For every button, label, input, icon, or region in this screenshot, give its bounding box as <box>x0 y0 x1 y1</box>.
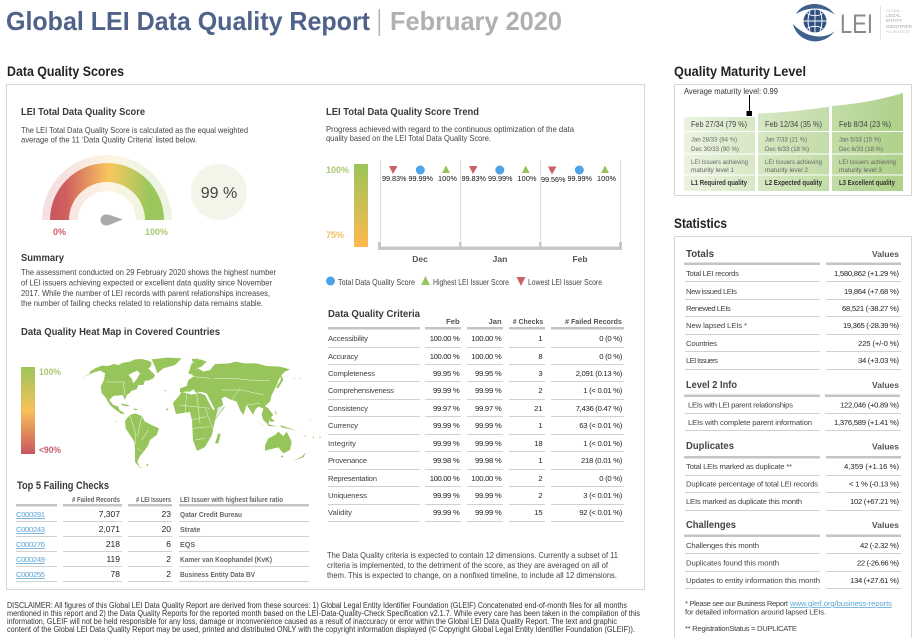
text: total score description: The LEI Total Data Quality Score is calculated as the equal weighted <box>21 126 248 135</box>
text: total score heading: LEI Total Data Quality Score <box>21 106 145 118</box>
table: data quality criteria: Completeness <box>328 369 375 378</box>
maturity column: L1: Feb 27/34 (79 %) <box>691 120 747 129</box>
text: statistics footnotes: www.gleif.org/business-reports <box>789 599 892 608</box>
table: top 5 failing checks: # Failed Records <box>72 497 120 504</box>
table: data quality criteria: # Checks <box>513 317 543 326</box>
table: top 5 failing checks: C000249 <box>16 555 45 564</box>
table: data quality criteria: 99.99 % <box>475 491 502 500</box>
text: summary: the number of failing checks related to relationship data remains stable. <box>21 299 263 308</box>
title: Global LEI Data Quality Report <box>6 6 370 36</box>
maturity column: L3: Dec 6/33 (18 %) <box>839 146 883 153</box>
table: data quality criteria: Consistency <box>328 404 368 413</box>
heat map legend: <90% <box>39 445 61 455</box>
heading: top 5 failing checks: Top 5 Failing Checks <box>17 480 109 492</box>
trend chart <box>326 160 622 264</box>
trend chart: Dec <box>412 254 428 264</box>
trend chart: 99.56% <box>541 175 566 184</box>
table: top 5 failing checks <box>16 497 309 582</box>
maturity column: L1: maturity level 1 <box>691 167 734 174</box>
maturity column: L1: Dec 30/33 (90 %) <box>691 146 739 153</box>
icon: LEI logo: LEI <box>840 9 873 39</box>
maturity column: L1 <box>684 117 755 191</box>
text: disclaimer: information, GLEIF will not be held responsible for any loss, damage or inconvenience caused as a result of inaccuracy or error within the Global LEI Data Quality Report. The text and graphic <box>7 617 617 626</box>
table: challenges: 42 (-2.32 %) <box>860 541 899 550</box>
table: data quality criteria: 99.99 % <box>433 491 460 500</box>
table: data quality criteria: 99.97 % <box>433 404 460 413</box>
table: top 5 failing checks: 2 <box>166 569 171 579</box>
text: statistics footnotes: ** RegistrationStatus = DUPLICATE <box>685 624 797 633</box>
text: summary: Summary <box>21 252 64 264</box>
table: top 5 failing checks: # LEI Issuers <box>136 497 171 504</box>
table: top 5 failing checks: 218 <box>106 539 120 549</box>
table: data quality criteria: 63 (< 0.01 %) <box>579 421 623 430</box>
table: data quality criteria: 99.95 % <box>433 369 460 378</box>
table: data quality criteria: Integrity <box>328 439 356 448</box>
table: totals: Total LEI records <box>686 269 739 278</box>
table: data quality criteria: 0 (0 %) <box>599 474 623 483</box>
table: top 5 failing checks: EQS <box>180 540 195 549</box>
table: data quality criteria: 99.98 % <box>433 456 460 465</box>
table: data quality criteria: Comprehensiveness <box>328 386 394 395</box>
maturity column: L2: Feb 12/34 (35 %) <box>765 120 822 129</box>
table: data quality criteria: Data Quality Criteria <box>328 308 420 320</box>
table: level 2 info <box>684 379 901 430</box>
trend chart: 99.99% <box>488 174 513 183</box>
table: data quality criteria: 18 <box>534 439 543 448</box>
table: data quality criteria: Currency <box>328 421 358 430</box>
table: challenges: Challenges <box>686 519 736 531</box>
table: challenges: 134 (+27.61 %) <box>850 576 899 585</box>
table: data quality criteria: 1 (< 0.01 %) <box>583 439 623 448</box>
table: data quality criteria: Uniqueness <box>328 491 367 500</box>
table: data quality criteria: Representation <box>328 474 377 483</box>
table: data quality criteria: Validity <box>328 508 352 517</box>
table: data quality criteria: 100.00 % <box>430 474 460 483</box>
table: data quality criteria: 99.99 % <box>433 421 460 430</box>
table: top 5 failing checks: C000243 <box>16 525 45 534</box>
table: top 5 failing checks: 78 <box>111 569 120 579</box>
gauge chart: 0% <box>53 227 66 237</box>
heading: quality maturity level: Quality Maturity Level <box>674 63 806 79</box>
table: top 5 failing checks: 20 <box>162 524 171 534</box>
table: duplicates: Duplicates <box>686 440 734 452</box>
table: top 5 failing checks: 2 <box>166 554 171 564</box>
trend chart: Feb <box>572 254 588 264</box>
table: totals: 225 (+/-0 %) <box>858 339 899 348</box>
table: challenges: 22 (-26.66 %) <box>857 558 899 568</box>
trend chart: 100% <box>438 174 458 183</box>
table: level 2 info: 1,376,589 (+1.41 %) <box>834 418 899 427</box>
trend legend: Highest LEI Issuer Score <box>433 278 509 287</box>
icon: LEI logo: ENTITY <box>886 18 902 23</box>
table: totals <box>684 248 901 370</box>
text: summary: The assessment conducted on 29 February 2020 shows the highest number <box>21 268 276 277</box>
trend legend: Lowest LEI Issuer Score <box>528 278 602 287</box>
table: data quality criteria: 100.00 % <box>471 334 502 343</box>
trend chart: 100% <box>597 174 616 183</box>
table: challenges <box>684 519 901 588</box>
table: data quality criteria: 99.99 % <box>433 508 460 517</box>
table: data quality criteria: 21 <box>534 404 543 413</box>
table: data quality criteria: 7,436 (0.47 %) <box>576 404 623 413</box>
table: duplicates: 102 (+67.21 %) <box>850 497 899 506</box>
table: level 2 info: LEIs with LEI parent relationships <box>688 400 793 410</box>
trend legend <box>326 276 602 287</box>
icon: LEI logo <box>793 4 913 41</box>
table: data quality criteria: Accuracy <box>328 352 358 361</box>
text: total score description: average of the 11 ‘Data Quality Criteria’ listed below. <box>21 136 197 144</box>
text: criteria note <box>327 551 618 580</box>
text: disclaimer: content of the Global LEI Data Quality Report may be used, printed and distributed ONLY with the copyright information displayed (© Copyright Global Legal Entity Identifier Foundation (GLEIF)). <box>7 625 635 634</box>
table: data quality criteria: 3 (< 0.01 %) <box>583 491 623 500</box>
table: totals: Renewed LEIs <box>686 304 731 313</box>
text: criteria note: The Data Quality criteria is expected to contain 12 dimensions. Currently a subset of 11 <box>327 551 618 560</box>
maturity column: L3: L3 Excellent quality <box>839 180 895 187</box>
table: data quality criteria: 15 <box>534 508 543 517</box>
table: data quality criteria: 100.00 % <box>430 334 460 343</box>
table: totals: Countries <box>686 339 717 348</box>
heat map legend <box>21 367 61 455</box>
table: data quality criteria: 2,091 (0.13 %) <box>576 369 623 378</box>
gauge chart: 100% <box>145 227 168 237</box>
trend legend: Total Data Quality Score <box>338 278 415 287</box>
table: totals: 34 (+3.03 %) <box>858 356 899 365</box>
table: totals: LEI Issuers <box>686 356 718 365</box>
table: duplicates: 4,359 (+1.16 %) <box>844 462 899 471</box>
gauge chart <box>42 155 172 237</box>
score badge <box>191 164 247 220</box>
title <box>6 6 562 36</box>
text: statistics footnotes: for detailed information around lapsed LEIs. <box>685 608 826 616</box>
text: summary: of LEI issuers achieving expected or excellent data quality since November <box>21 278 272 288</box>
table: data quality criteria: 99.99 % <box>433 439 460 448</box>
table: top 5 failing checks: 6 <box>166 539 171 549</box>
table: duplicates: Duplicate percentage of total LEI records <box>686 480 818 488</box>
table: top 5 failing checks: 23 <box>162 509 171 519</box>
table: data quality criteria <box>328 308 624 522</box>
text: summary: 2017. While the number of LEI records with parent relationships increases, <box>21 289 270 298</box>
trend chart: 100% <box>518 174 537 183</box>
table: level 2 info: LEIs with complete parent information <box>688 418 812 427</box>
maturity column: L2: maturity level 2 <box>765 167 808 174</box>
table: challenges: Updates to entity information this month <box>686 576 820 585</box>
table: data quality criteria: 99.99 % <box>475 439 502 448</box>
table: data quality criteria: 8 <box>538 352 543 361</box>
table: data quality criteria: 0 (0 %) <box>599 334 623 343</box>
table: data quality criteria: 99.99 % <box>475 386 502 395</box>
panel: data quality scores <box>6 84 644 590</box>
table: duplicates: LEIs marked as duplicate this month <box>686 497 802 506</box>
table: data quality criteria: 100.00 % <box>471 474 502 483</box>
marker: average maturity pointer <box>746 95 752 116</box>
maturity column: L3: Jan 5/33 (15 %) <box>839 136 881 144</box>
icon: LEI logo: LEGAL <box>886 13 901 18</box>
table: challenges: Challenges this month <box>686 541 759 550</box>
table: data quality criteria: 92 (< 0.01 %) <box>579 508 623 517</box>
maturity column: L3: maturity level 3 <box>839 167 882 174</box>
icon: LEI logo: FOUNDATION <box>886 30 910 34</box>
table: totals: Totals <box>686 248 714 260</box>
table: top 5 failing checks: C000276 <box>16 540 45 549</box>
text: heat map heading: Data Quality Heat Map in Covered Countries <box>21 326 220 338</box>
table: top 5 failing checks: Kamer van Koophandel (KvK) <box>180 555 273 564</box>
table: data quality criteria: 99.99 % <box>475 421 502 430</box>
table: data quality criteria: Accessibility <box>328 334 368 343</box>
icon: LEI logo: GLOBAL <box>886 9 900 13</box>
table: totals: New issued LEIs <box>686 287 737 296</box>
text: summary <box>21 252 276 308</box>
maturity column: L1: L1 Required quality <box>691 180 747 187</box>
table: totals: 19,365 (-28.39 %) <box>843 321 899 330</box>
maturity column: L2: Jan 7/33 (21 %) <box>765 136 807 144</box>
trend chart: 99.99% <box>568 174 592 183</box>
text: statistics footnotes: * Please see our Business Report <box>685 599 789 608</box>
trend chart: Jan <box>493 254 507 264</box>
maturity column: L2 <box>758 107 829 191</box>
table: data quality criteria: 1 (< 0.01 %) <box>583 386 623 395</box>
table: data quality criteria: 99.98 % <box>475 456 502 465</box>
table: data quality criteria: 1 <box>538 334 543 343</box>
trend chart: 75% <box>326 230 344 240</box>
table: top 5 failing checks: Qatar Credit Bureau <box>180 510 242 519</box>
table: duplicates <box>684 440 901 510</box>
table: data quality criteria: 218 (0.01 %) <box>581 456 623 465</box>
text: statistics footnotes <box>685 599 892 633</box>
table: top 5 failing checks: 119 <box>106 554 120 564</box>
trend chart: 99.83% <box>382 174 407 183</box>
table: data quality criteria: 2 <box>538 386 543 395</box>
table: data quality criteria: 2 <box>538 491 543 500</box>
maturity column: L3 <box>832 93 903 191</box>
table: totals: 1,580,862 (+1.29 %) <box>834 269 899 278</box>
maturity column: L2: Dec 6/33 (18 %) <box>765 146 809 153</box>
table: duplicates: Values <box>872 442 899 452</box>
table: totals: New lapsed LEIs * <box>686 321 747 330</box>
heading: statistics: Statistics <box>674 215 727 231</box>
heading: data quality scores: Data Quality Scores <box>7 63 124 79</box>
table: data quality criteria: 99.97 % <box>475 404 502 413</box>
panel: statistics <box>674 236 912 638</box>
trend chart: 99.83% <box>462 174 486 183</box>
text: disclaimer <box>7 601 640 634</box>
text: trend description: Progress achieved with regard to the continuous optimization of the data <box>326 125 574 134</box>
table: top 5 failing checks: 2,071 <box>99 524 120 534</box>
maturity column: L1: Jan 28/33 (84 %) <box>691 136 737 144</box>
table: data quality criteria: 99.95 % <box>475 369 502 378</box>
table: top 5 failing checks: Business Entity Data BV <box>180 570 255 579</box>
table: top 5 failing checks: C000291 <box>16 510 45 519</box>
table: level 2 info: 122,046 (+0.89 %) <box>840 400 899 410</box>
maturity column: L3: Feb 8/34 (23 %) <box>839 120 891 129</box>
text: average maturity level: Average maturity level: 0.99 <box>684 87 778 96</box>
title: February 2020 <box>390 6 562 36</box>
table: data quality criteria: 1 <box>538 456 543 465</box>
table: data quality criteria: 1 <box>538 421 543 430</box>
table: data quality criteria: 99.99 % <box>475 508 502 517</box>
table: data quality criteria: 3 <box>538 369 543 378</box>
icon: LEI logo: IDENTIFIER <box>886 24 913 29</box>
table: top 5 failing checks: C000255 <box>16 570 45 579</box>
text: trend description: quality based on the LEI Total Data Quality Score. <box>326 134 491 143</box>
table: data quality criteria: Jan <box>488 317 502 326</box>
trend chart: 100% <box>326 165 349 175</box>
maturity column: L2: LEI Issuers achieving <box>765 159 822 166</box>
table: top 5 failing checks: LEI Issuer with highest failure ratio <box>180 497 283 504</box>
table: duplicates: Total LEIs marked as duplicate ** <box>686 462 792 471</box>
maturity column: L3: LEI Issuers achieving <box>839 159 896 166</box>
score badge: 99 % <box>201 185 237 202</box>
table: data quality criteria: 2 <box>538 474 543 483</box>
world map <box>82 358 321 468</box>
maturity column: L1: LEI Issuers achieving <box>691 159 748 166</box>
table: data quality criteria: 99.99 % <box>433 386 460 395</box>
heat map legend: 100% <box>39 367 61 377</box>
text: criteria note: criteria is implemented, to the detriment of the score, as they are averaged on all of <box>327 561 609 570</box>
table: data quality criteria: 0 (0 %) <box>599 352 623 361</box>
table: data quality criteria: Provenance <box>328 456 367 465</box>
text: trend description <box>326 125 574 143</box>
table: duplicates: < 1 % (-0.13 %) <box>849 480 899 488</box>
table: challenges: Values <box>872 520 899 530</box>
text: disclaimer: DISCLAIMER: All figures of this Global LEI Data Quality Report are derived from these sources: 1) Global Legal Entity Identifier Foundation (GLEIF) Concatenated end-of-month files for all months <box>7 601 627 610</box>
table: data quality criteria: Feb <box>446 317 460 326</box>
text: total score description <box>21 126 248 144</box>
table: challenges: Duplicates found this month <box>686 558 779 568</box>
panel: quality maturity level <box>674 84 912 196</box>
text: disclaimer: mentioned in this report and 2) the Data Quality Reports for the reported month based on the LEI-Data-Quality-Check Specification v2.1.7. While every care has been taken in the compilation of this <box>7 609 640 618</box>
table: totals: 68,521 (-38.27 %) <box>842 304 899 313</box>
table: top 5 failing checks: Strate <box>180 525 200 534</box>
table: data quality criteria: # Failed Records <box>565 317 622 326</box>
table: level 2 info: Level 2 Info <box>686 379 737 391</box>
text: trend heading: LEI Total Data Quality Score Trend <box>326 106 479 118</box>
maturity column: L2: L2 Expected quality <box>765 180 822 187</box>
text: criteria note: them. This is expected to change, on a nonfixed timeline, to include all 12 dimensions. <box>327 571 617 580</box>
table: totals: 19,864 (+7.68 %) <box>844 287 899 296</box>
table: data quality criteria: 100.00 % <box>430 352 460 361</box>
table: data quality criteria: 100.00 % <box>471 352 502 361</box>
table: top 5 failing checks: 7,307 <box>99 509 120 519</box>
table: level 2 info: Values <box>872 380 899 390</box>
table: totals: Values <box>872 249 899 259</box>
trend chart: 99.99% <box>408 174 434 183</box>
